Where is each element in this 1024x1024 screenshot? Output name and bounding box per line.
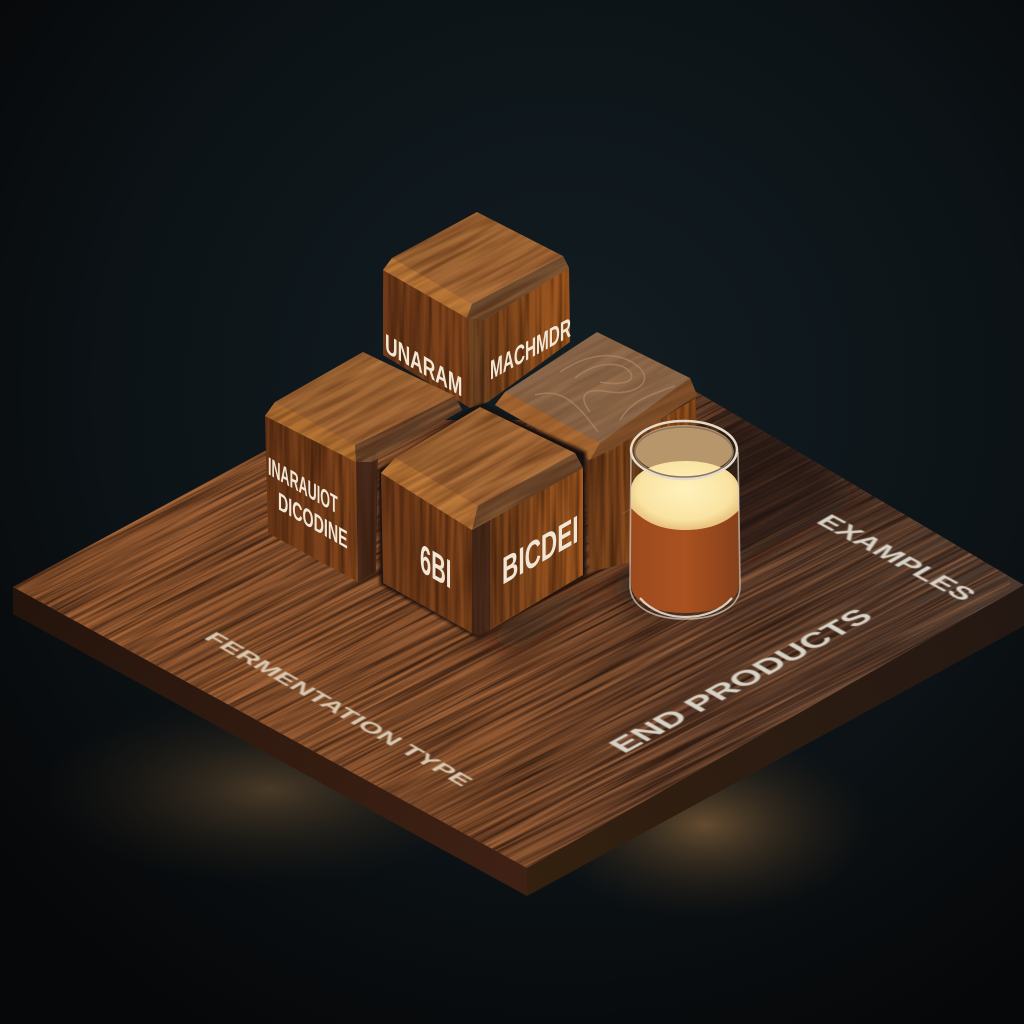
glass base highlight xyxy=(640,598,732,617)
right cube side grain xyxy=(586,398,696,571)
left cube corner strip xyxy=(356,452,378,582)
back cube right face xyxy=(485,268,570,402)
front cube side grain xyxy=(381,470,583,636)
right cube side face xyxy=(585,398,696,572)
left cube right chamfer xyxy=(355,396,462,462)
block: left cube xyxy=(265,352,462,582)
swirl wood pattern xyxy=(535,356,675,432)
board label: examples: EXAMPLES xyxy=(810,511,982,605)
board left side xyxy=(13,587,527,896)
board right side xyxy=(527,585,1024,896)
label: front cube left: 6BI xyxy=(420,536,451,598)
front cube left chamfer xyxy=(381,458,478,530)
glass back xyxy=(630,450,740,618)
right cube left chamfer xyxy=(495,392,600,460)
back cube side grain xyxy=(383,268,570,408)
left cube left chamfer xyxy=(265,402,356,462)
floor light glow right xyxy=(535,730,875,920)
board wood grain xyxy=(14,392,1014,868)
glass walls xyxy=(630,452,740,619)
right cube top grain xyxy=(496,338,692,458)
front cube corner strip xyxy=(472,520,490,636)
label: back cube right: MACHMDR xyxy=(490,312,571,386)
left cube left face xyxy=(265,416,358,582)
glass rim xyxy=(631,421,737,479)
front cube left face xyxy=(381,473,472,633)
block: back cube xyxy=(383,212,571,408)
label: right cube partial: E xyxy=(620,481,636,521)
back cube left face xyxy=(383,270,470,408)
front cube right face xyxy=(490,468,583,630)
label: left cube line one: INARAUIOT xyxy=(268,452,338,520)
board label: end products: END PRODUCTS xyxy=(602,605,881,757)
right cube right chamfer xyxy=(590,378,697,460)
back cube left chamfer xyxy=(383,258,472,318)
floor light glow left xyxy=(40,695,500,885)
back cube top grain xyxy=(384,214,569,320)
glass upper tint xyxy=(635,425,733,475)
glass with drink xyxy=(630,421,740,619)
foam xyxy=(631,461,739,530)
back cube right chamfer xyxy=(467,256,569,320)
front cube right chamfer xyxy=(472,453,583,530)
left cube side grain xyxy=(265,416,376,580)
label: back cube left: UNARAM xyxy=(385,328,462,403)
glass inner rim xyxy=(635,427,733,477)
left cube top grain xyxy=(266,352,462,462)
board top surface xyxy=(13,388,1024,868)
label: left cube line two: DICODINE xyxy=(278,487,348,555)
dark gap around front cube xyxy=(378,404,586,638)
board label: fermentation type: FERMENTATION TYPE xyxy=(199,630,477,789)
wooden board xyxy=(13,391,1024,896)
cube and glass shadow xyxy=(470,410,860,650)
block: right cube xyxy=(495,332,697,572)
back cube corner strip xyxy=(467,318,488,408)
label: front cube right: BICDEI xyxy=(502,508,579,594)
block: front cube xyxy=(381,407,583,636)
drink liquid xyxy=(631,508,739,613)
front cube top grain xyxy=(386,408,582,530)
